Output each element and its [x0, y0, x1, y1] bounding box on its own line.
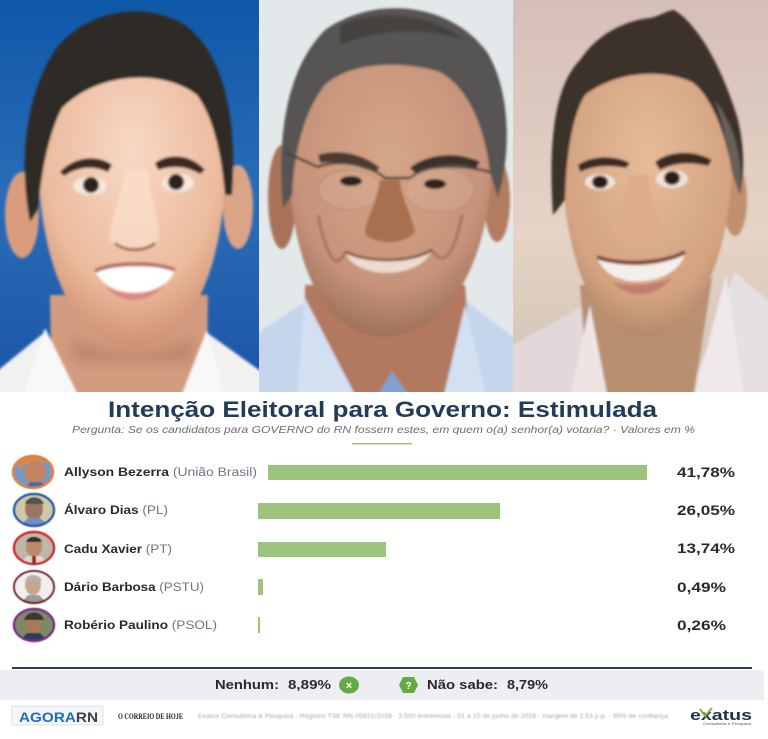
icon: x badge [339, 676, 359, 694]
bar: Cadu Xavier [258, 542, 386, 557]
avatar: Álvaro Dias [14, 494, 54, 528]
avatar: Cadu Xavier [14, 532, 54, 566]
label: Cadu Xavier: Cadu Xavier (PT) [64, 544, 172, 556]
title: Intenção Eleitoral para Governo: Estimulada [108, 397, 658, 422]
icon: x badge: × [346, 680, 352, 692]
icon: question badge: ? [405, 681, 412, 692]
photo: Allyson Bezerra [0, 0, 259, 392]
footnote: Exatus Consultoria & Pesquisa - Registro TSE RN-05821/2026 - 3.500 entrevistas - 01 a 10 de junho de 2026 - margem de 2,53 p.p. - 95% de confiança [198, 714, 669, 720]
bar: Álvaro Dias [258, 503, 500, 519]
logo: Exatus: exatus [690, 707, 752, 724]
subtitle: Pergunta: Se os candidatos para GOVERNO do RN fossem estes, em quem o(a) senhor(a) votaria? · Valores em % [72, 424, 695, 436]
row: Allyson Bezerra [13, 455, 736, 492]
value: Robério Paulino: 0,26% [677, 617, 727, 633]
row: Dário Barbosa [14, 571, 727, 605]
logo: Exatus: Consultoria e Pesquisa [703, 722, 751, 726]
logo: O Correio de Hoje: O CORREIO DE HOJE [118, 711, 183, 721]
label: Allyson Bezerra: Allyson Bezerra (União Brasil) [64, 467, 257, 479]
logo: Agora RN: AGORA RN [19, 709, 98, 725]
label: Robério Paulino: Robério Paulino (PSOL) [64, 620, 217, 632]
bar: Dário Barbosa [258, 579, 263, 595]
text: Nenhum: Nenhum: [215, 677, 279, 692]
text: Não sabe: Não sabe: [427, 677, 498, 692]
photo: Cadu Xavier [513, 0, 768, 392]
text: Não sabe [427, 677, 548, 692]
label: Álvaro Dias: Álvaro Dias (PL) [64, 504, 168, 517]
row: Cadu Xavier [14, 532, 736, 566]
avatar: Allyson Bezerra [13, 455, 53, 492]
row: Álvaro Dias [14, 494, 736, 528]
text: Não sabe: 8,79% [507, 677, 548, 692]
value: Allyson Bezerra: 41,78% [677, 464, 736, 480]
summary band [0, 670, 764, 700]
value: Dário Barbosa: 0,49% [677, 579, 727, 595]
logo: Exatus [690, 707, 752, 726]
text: Nenhum: 8,89% [288, 677, 331, 692]
value: Cadu Xavier: 13,74% [677, 540, 736, 556]
avatar: Robério Paulino [14, 609, 54, 643]
bar: Allyson Bezerra [268, 465, 647, 480]
value: Álvaro Dias: 26,05% [677, 502, 736, 518]
avatar: Dário Barbosa [14, 571, 54, 605]
text: Nenhum [215, 677, 331, 692]
bar: Robério Paulino [258, 617, 260, 633]
row: Robério Paulino [14, 609, 727, 643]
label: Dário Barbosa: Dário Barbosa (PSTU) [64, 582, 204, 594]
icon: question badge [399, 677, 418, 693]
photo: Álvaro Dias [259, 0, 513, 392]
